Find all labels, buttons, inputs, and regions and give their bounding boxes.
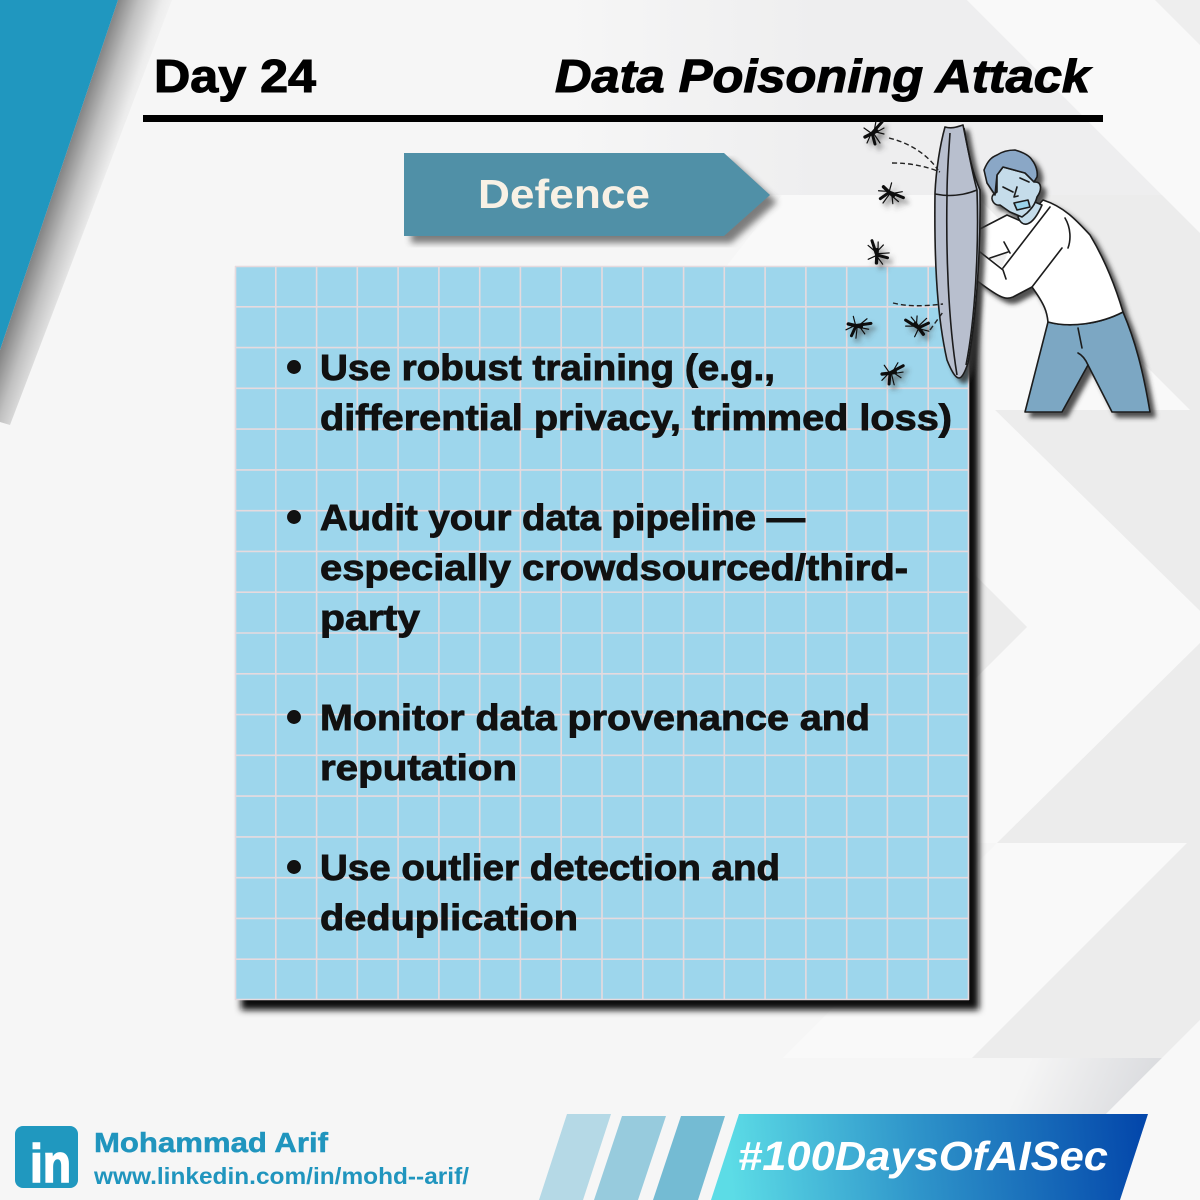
tip 1 — [288, 347, 952, 438]
tip 2: especially crowdsourced/third- — [320, 547, 908, 588]
dashed flight paths — [889, 138, 943, 330]
man figure — [976, 150, 1150, 412]
tip 4 — [288, 847, 780, 938]
footer: decorative slanted stripes — [539, 1114, 725, 1200]
tip 1: differential privacy, trimmed loss) — [320, 397, 952, 438]
mosquitoes — [843, 121, 930, 387]
footer: profile URL: www.linkedin.com/in/mohd--arif/ — [93, 1163, 469, 1189]
heading: title: Data Poisoning Attack — [555, 50, 1093, 102]
footer: LinkedIn icon: in — [30, 1134, 71, 1194]
heading: day number: Day 24 — [154, 50, 316, 102]
tip 2: party — [320, 597, 420, 638]
tip 2 — [288, 497, 908, 638]
footer: hashtag banner: #100DaysOfAISec — [738, 1133, 1108, 1179]
header rule — [143, 115, 1103, 122]
section banner arrow: Defence: Defence — [478, 171, 650, 217]
tip 2: Audit your data pipeline — — [320, 497, 805, 538]
footer: hashtag banner — [711, 1114, 1148, 1200]
tip 1: Use robust training (e.g., — [320, 347, 775, 388]
section banner arrow: Defence — [404, 153, 777, 243]
illustration: man blocking mosquitoes with a shield — [843, 121, 1150, 412]
tip 4: Use outlier detection and — [320, 847, 780, 888]
footer: LinkedIn icon — [15, 1126, 78, 1194]
corner accent: teal triangle with shadow — [0, 0, 172, 425]
shield — [935, 125, 980, 378]
footer: author name: Mohammad Arif — [94, 1127, 329, 1158]
tip 3: Monitor data provenance and — [320, 697, 870, 738]
tip 3: reputation — [320, 747, 517, 788]
tip 4: deduplication — [320, 897, 578, 938]
panel: defence tips on blue grid — [235, 266, 979, 1010]
tip 3 — [288, 697, 870, 788]
